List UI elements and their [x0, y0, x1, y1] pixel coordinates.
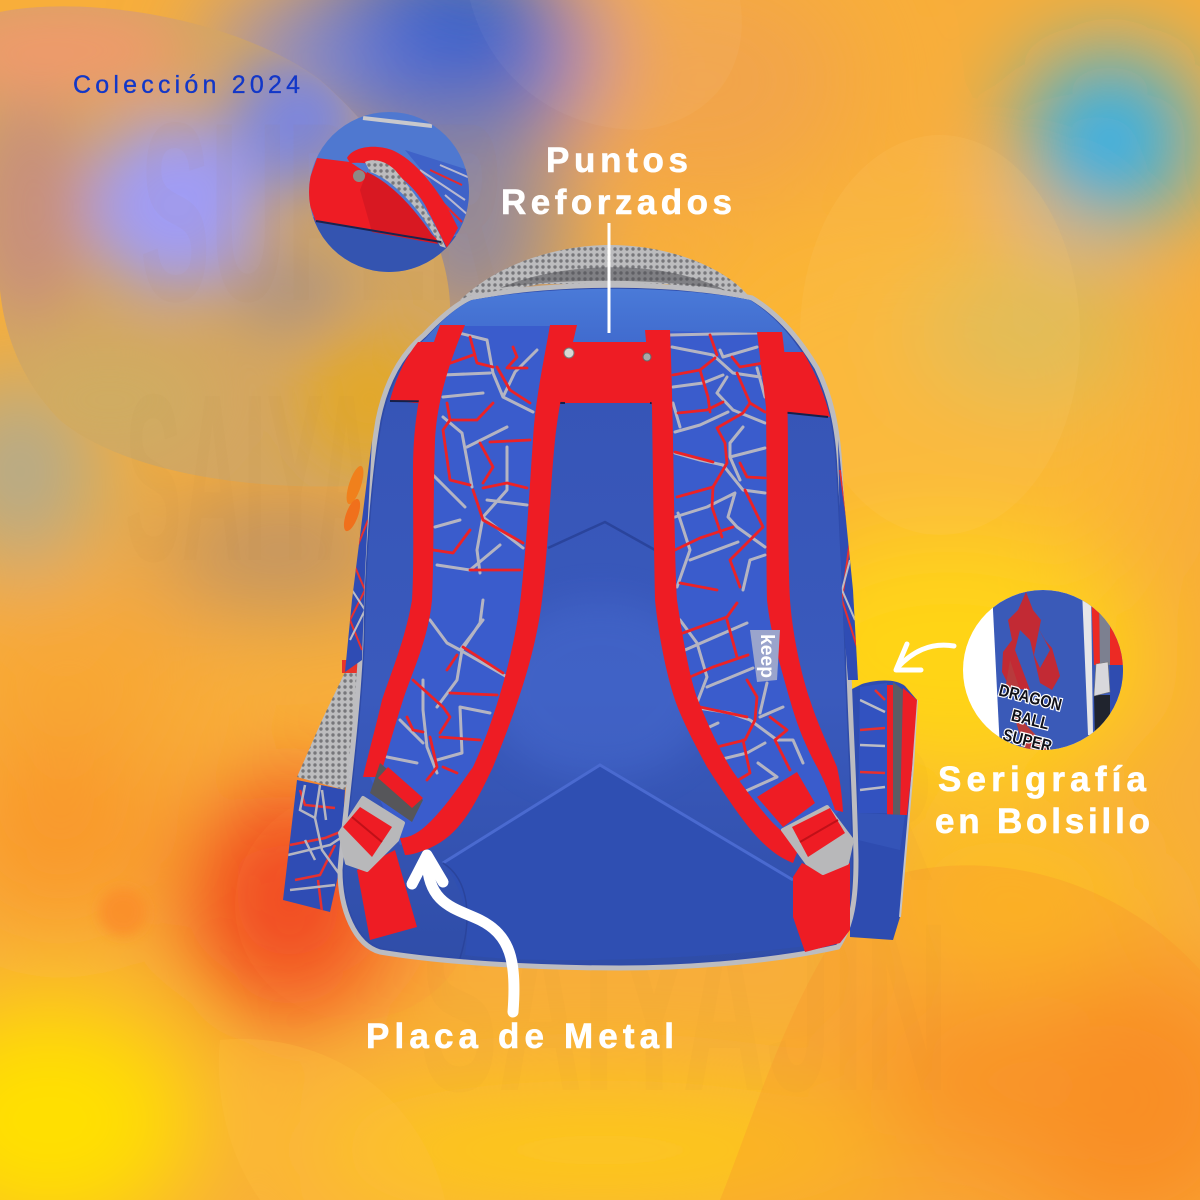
brand tag	[750, 630, 780, 682]
arrow: pocket	[896, 644, 954, 670]
left shoulder strap	[363, 325, 577, 855]
ghost lettering: SUPER	[140, 70, 503, 355]
heading: Serigrafía en Bolsillo: Serigrafía	[938, 760, 1147, 799]
printed side strips	[345, 440, 858, 680]
ghost lettering: SAIYAN	[125, 344, 438, 611]
right shoulder strap	[645, 330, 843, 863]
bag outer piping	[340, 285, 856, 968]
heading: Puntos Reforzados	[501, 141, 732, 222]
arrow: metal plate	[412, 855, 514, 1012]
ghost lettering: ER	[760, 703, 935, 922]
heading: Placa de Metal: Placa de Metal	[366, 1017, 674, 1056]
right buckle and red webbing	[757, 772, 852, 952]
front pocket right	[850, 680, 917, 940]
inset: pocket screen print: SUPER	[1001, 726, 1054, 756]
heading: Serigrafía en Bolsillo: en Bolsillo	[935, 802, 1150, 841]
quilted panel shading	[443, 522, 815, 960]
inset: pocket screen print: BALL	[1009, 707, 1051, 734]
inset: reinforced stitching detail	[309, 112, 469, 272]
zipper pull on left side	[341, 464, 367, 533]
ghost lettering	[125, 70, 949, 1142]
red top band	[390, 342, 830, 417]
top mesh handle	[460, 245, 752, 300]
brand tag: keep	[756, 634, 777, 678]
label: Colección 2024: Colección 2024	[73, 71, 300, 99]
bag body	[344, 289, 852, 964]
connector line: Puntos Reforzados	[608, 223, 610, 333]
upper blue panel	[415, 289, 803, 354]
backpack	[283, 245, 917, 968]
inset: pocket screen print: DRAGON	[997, 682, 1064, 715]
background blob: top-left shape	[0, 6, 450, 486]
inset: pocket screen print	[963, 590, 1123, 756]
heading: Puntos Reforzados: Reforzados	[501, 183, 732, 222]
ghost lettering: SAIYAJIN	[420, 874, 949, 1142]
strap rivets	[564, 348, 651, 361]
left buckle and red webbing	[340, 763, 423, 940]
side pouch left	[283, 660, 362, 912]
heading: Puntos Reforzados: Puntos	[546, 141, 688, 180]
heading: Serigrafía en Bolsillo	[935, 760, 1150, 841]
